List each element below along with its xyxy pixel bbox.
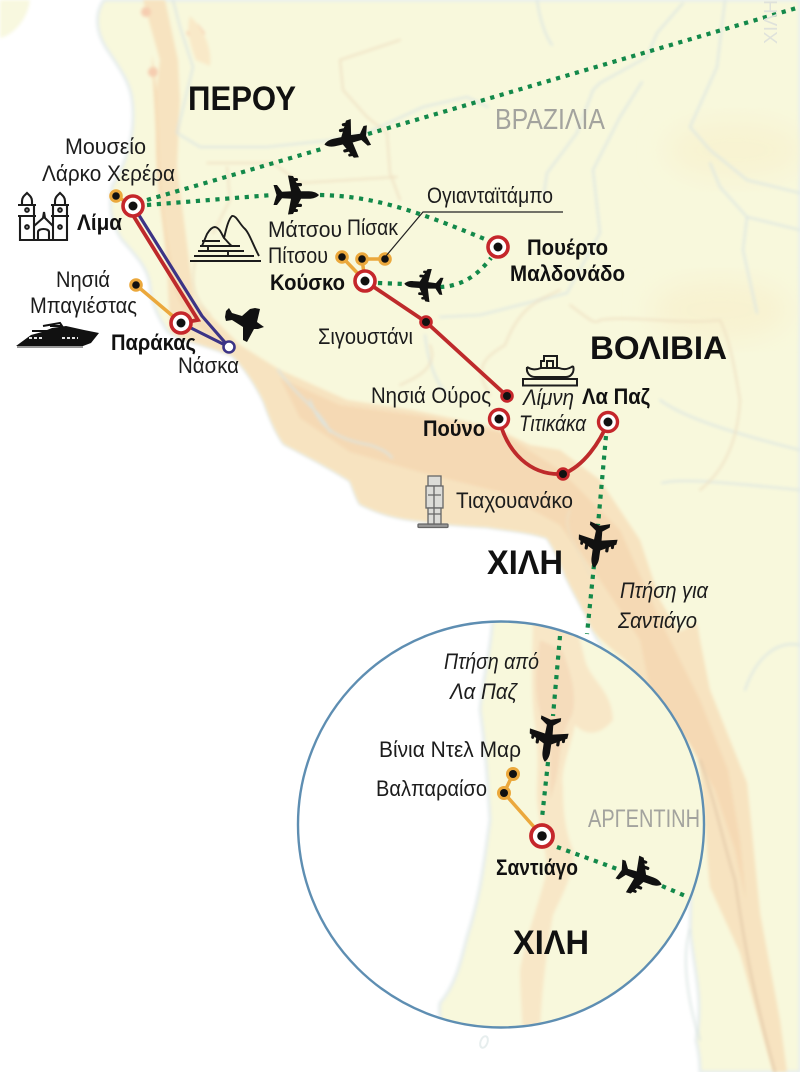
labels: places: Βίνια Ντελ Μαρ (379, 737, 521, 762)
marker: Sacred Valley stops (335, 250, 392, 266)
labels: countries: ΧΙΛΗ (513, 924, 589, 962)
icon: Machu Picchu (190, 216, 261, 261)
marker: La Paz (598, 412, 618, 432)
marker: Vina del Mar and Valparaiso (497, 767, 520, 800)
route: Puno to La Paz (499, 419, 608, 474)
marker: Puerto Maldonado (488, 237, 508, 257)
labels: countries (188, 80, 727, 962)
labels: places: Μαλδονάδο (510, 261, 625, 286)
icon: plane over Peru to Brazil (320, 116, 373, 164)
icon: plane leaving Santiago (612, 851, 668, 903)
labels: places: Παράκας (111, 330, 196, 355)
labels: places: Τιαχουανάκο (456, 488, 573, 513)
route: excursions (orange) (116, 196, 542, 836)
marker: Paracas (171, 313, 191, 333)
route: air links (147, 7, 800, 897)
labels: places: Νησιά (56, 267, 110, 292)
labels: places: Σαντιάγο (496, 855, 578, 880)
labels: places: Τιτικάκα (519, 411, 587, 436)
marker: Santiago (531, 825, 553, 847)
route: Lima to Nasca and Paracas by road (navy) (137, 212, 229, 347)
icon: small plane over Nasca (225, 308, 264, 342)
icon: plane to Santiago (575, 520, 620, 570)
labels: places: Νησιά Ούρος (371, 383, 491, 408)
marker: Uros Islands (500, 389, 514, 403)
labels: places: Λα Παζ (582, 384, 651, 409)
marker: Sillustani (419, 315, 433, 329)
labels: places: Μπαγιέστας (30, 293, 137, 318)
panel: Santiago inset circle (298, 600, 720, 1040)
leader line: Ollantaytambo (386, 212, 563, 256)
labels: places: Σιγουστάνι (318, 324, 413, 349)
route: Cusco to Lake Titicaca (365, 281, 507, 396)
rivers (173, 0, 800, 1040)
labels: countries: ΒΟΛΙΒΙΑ (590, 330, 727, 366)
small offshore island (479, 1035, 489, 1049)
labels: places: Σαντιάγο (617, 608, 697, 633)
icon: plane from Lima to Puerto Maldonado (274, 176, 319, 214)
icon: plane arriving at Santiago (526, 714, 571, 764)
labels: countries: ΧΙΛΗ (487, 544, 563, 582)
labels: places: Κούσκο (270, 270, 345, 295)
labels: places: Λα Παζ (448, 679, 518, 704)
route: Lima to Paracas (red) (131, 212, 198, 323)
icon: Tiwanaku monolith (418, 476, 448, 528)
labels: places: Πτήση από (444, 649, 539, 674)
marker: Lima (109, 189, 143, 216)
marker: Cusco (355, 271, 375, 291)
marker: Ballestas Islands (129, 278, 143, 292)
labels: countries: ΑΡΓΕΝΤΙΝΗ (588, 805, 700, 833)
labels: places: Βαλπαραίσο (376, 776, 487, 801)
labels: places: Ογιανταϊτάμπο (427, 183, 553, 208)
marker: Nasca (224, 342, 234, 352)
relief blotches in northern Peru (141, 7, 210, 77)
marker: Tiwanaku stop on route (556, 467, 570, 481)
icon: yacht (16, 323, 99, 347)
labels: places (30, 134, 709, 880)
labels: places: Πίσακ (347, 215, 399, 240)
labels: places: Νάσκα (178, 353, 239, 378)
labels: places: Λίμνη (521, 385, 574, 410)
labels: places: Πουέρτο (527, 235, 608, 260)
marker: Puno (490, 410, 508, 428)
labels: places: Πτήση για (620, 578, 709, 603)
icon: plane from Cusco to Puerto Maldonado (403, 267, 444, 303)
labels: countries: ΠΕΡΟΥ (188, 80, 296, 118)
labels: places: Λίμα (77, 210, 122, 235)
faint cropped label at top right: ΧΙΛΗ (761, 0, 781, 44)
labels: countries: ΒΡΑΖΙΛΙΑ (495, 104, 606, 136)
icon: Lima cathedral (18, 193, 69, 240)
icon: Titicaca reed boat (523, 356, 577, 386)
labels: places: Μάτσου (268, 217, 342, 242)
labels: places: Λάρκο Χερέρα (42, 161, 175, 186)
labels: places: Πίτσου (268, 243, 328, 268)
borders (193, 40, 775, 1072)
labels: places: Μουσείο (65, 134, 146, 159)
labels: places: Πούνο (423, 416, 485, 441)
